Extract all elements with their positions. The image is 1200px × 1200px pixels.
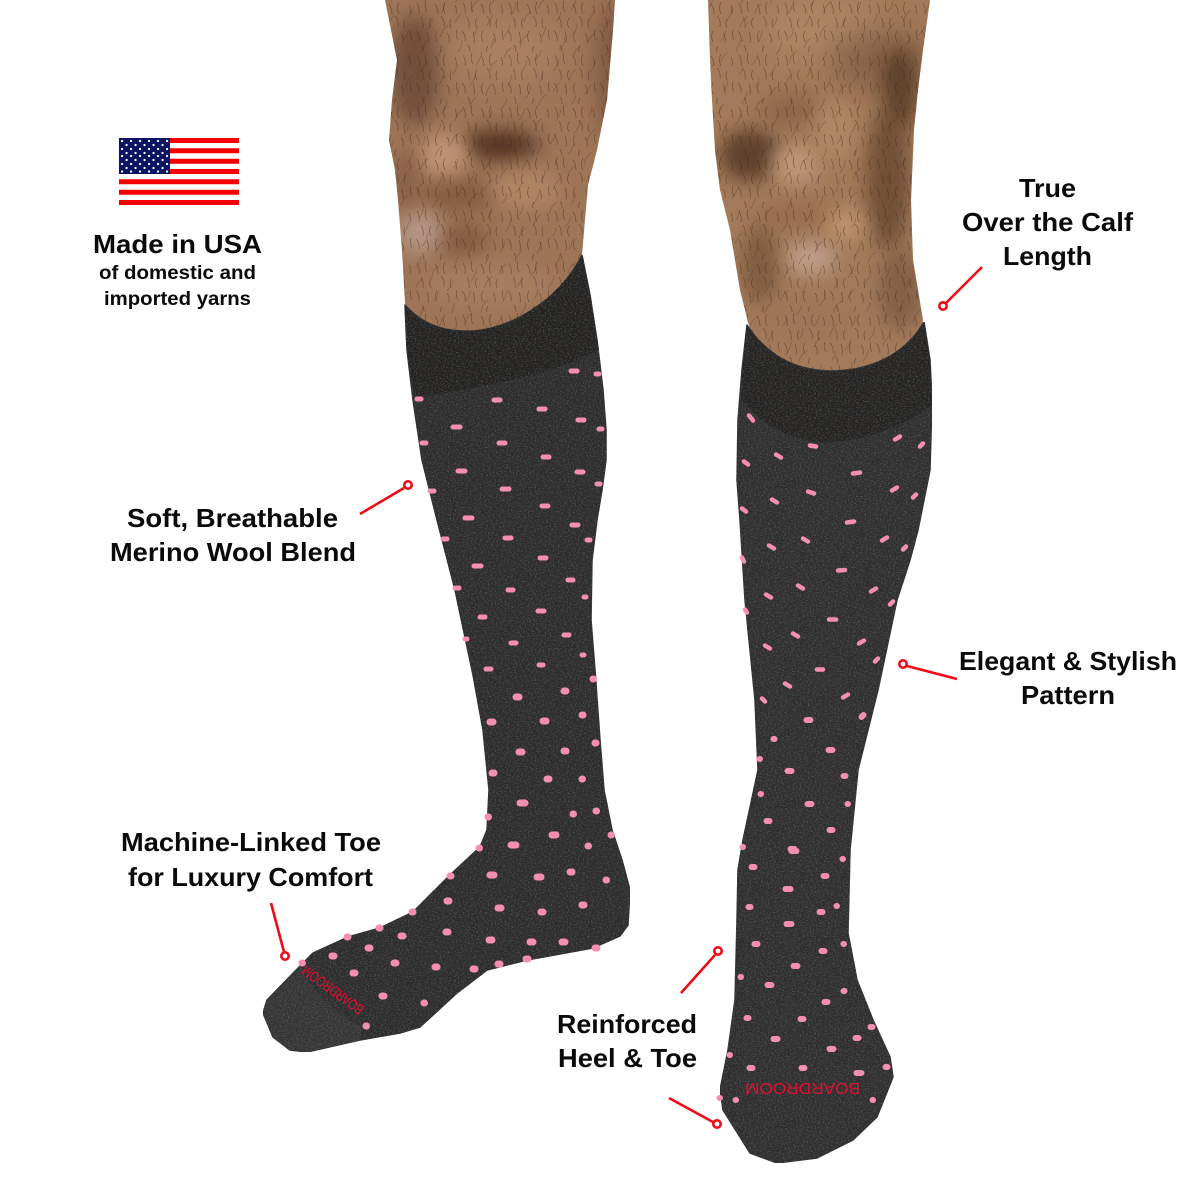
left leg skin [385, 0, 615, 330]
leader line: merino wool [360, 481, 412, 514]
photo: left leg with sock [263, 0, 630, 1052]
callout: True Over the Calf Length: True [1019, 173, 1076, 203]
right sock logo: BOARDROOM [745, 1079, 860, 1096]
leader line: reinforced toe [669, 1098, 721, 1128]
leader line: calf length [939, 267, 982, 310]
text: Made in USA: of domestic and [99, 262, 256, 284]
text: Made in USA: imported yarns [104, 288, 251, 310]
right sock body [720, 322, 932, 1163]
text: Made in USA: Made in USA [93, 229, 262, 259]
callout: True Over the Calf Length: Length [1003, 241, 1092, 271]
left sock dots [302, 371, 612, 1026]
right sock dots [720, 416, 923, 1100]
left sock body [263, 255, 630, 1052]
leader line: pattern [899, 660, 957, 679]
callout: Reinforced Heel & Toe: Reinforced [557, 1009, 697, 1039]
callout: Elegant & Stylish Pattern [959, 646, 1177, 710]
callout: Elegant & Stylish Pattern: Elegant & Stylish [959, 646, 1177, 676]
callout: True Over the Calf Length: Over the Calf [962, 207, 1133, 237]
text: Made in USA [93, 229, 262, 310]
leader line: linked toe [271, 903, 289, 960]
callout: Elegant & Stylish Pattern: Pattern [1021, 680, 1115, 710]
photo: right leg with sock [700, 0, 940, 1163]
leader line: reinforced heel [681, 947, 722, 993]
callout: Reinforced Heel & Toe [557, 1009, 697, 1073]
left sock logo: BOARDROOM [299, 961, 367, 1018]
right leg skin [708, 0, 930, 370]
left sock cuff [405, 255, 599, 398]
flag: USA [119, 138, 239, 205]
callout: True Over the Calf Length [962, 173, 1133, 271]
callout: Reinforced Heel & Toe: Heel & Toe [558, 1043, 697, 1073]
right sock cuff [741, 322, 932, 443]
callout: Soft, Breathable Merino Wool Blend: Merino Wool Blend [110, 537, 356, 567]
callout: Machine-Linked Toe for Luxury Comfort [121, 827, 381, 892]
callout: Machine-Linked Toe for Luxury Comfort: Machine-Linked Toe [121, 827, 381, 857]
callout: Soft, Breathable Merino Wool Blend: Soft, Breathable [127, 503, 338, 533]
left sock toe shading [263, 966, 362, 1052]
callout: Machine-Linked Toe for Luxury Comfort: for Luxury Comfort [128, 862, 373, 892]
callout: Soft, Breathable Merino Wool Blend [110, 503, 356, 567]
